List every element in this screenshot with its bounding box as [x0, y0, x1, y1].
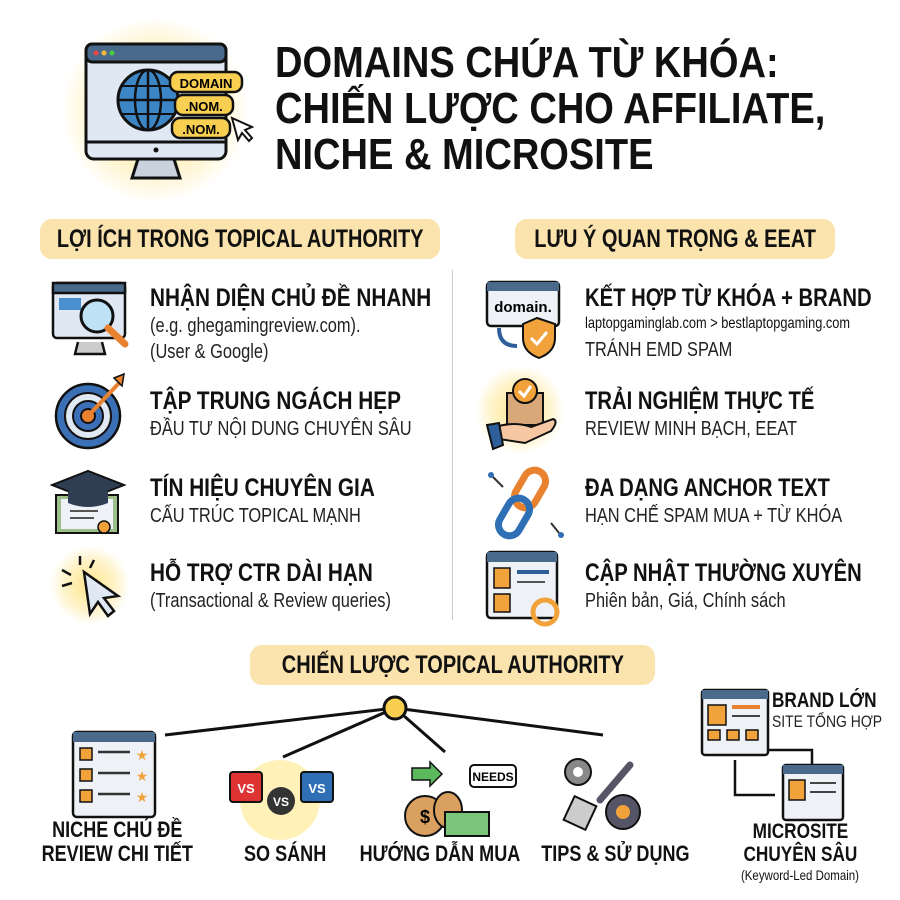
text: caution 4: CẬP NHẬT THƯỜNG XUYÊN	[585, 559, 862, 587]
text: caution 1: KẾT HỢP TỪ KHÓA + BRAND	[585, 284, 872, 312]
panel: cautions: TRÁNH EMD SPAM	[585, 339, 732, 361]
label: niche: REVIEW CHI TIẾT	[42, 841, 193, 866]
label: niche: NICHE CHỦ ĐỀ	[52, 817, 183, 842]
heading: right pill	[515, 219, 835, 259]
label: compare: SO SÁNH	[244, 841, 326, 866]
diagram: strategy tree: ★	[136, 768, 148, 784]
icon: target	[54, 372, 125, 450]
panel: cautions: laptopgaminglab.com > bestlaptopgaming.com	[585, 315, 850, 332]
panel: benefits: (e.g. ghegamingreview.com).	[150, 315, 361, 337]
heading: left pill: LỢI ÍCH TRONG TOPICAL AUTHORITY	[57, 225, 423, 253]
icon: domain shield	[486, 280, 560, 360]
icon: monitor with domain tags: DOMAIN	[180, 76, 232, 91]
label: buying guide: HƯỚNG DẪN MUA	[360, 841, 520, 866]
text: benefit 2: TẬP TRUNG NGÁCH HẸP	[150, 387, 401, 415]
panel: benefits: CẤU TRÚC TOPICAL MẠNH	[150, 505, 361, 527]
diagram: strategy tree: ★	[136, 747, 148, 763]
panel: cautions	[478, 280, 872, 626]
text: caution 2: TRẢI NGHIỆM THỰC TẾ	[585, 387, 814, 415]
panel: brand vs microsite: (Keyword-Led Domain)	[741, 867, 859, 883]
title: NICHE & MICROSITE	[275, 130, 654, 179]
icon: monitor with domain tags: .NOM.	[185, 99, 223, 114]
diagram: strategy tree: VS	[308, 781, 326, 796]
panel: benefits: (User & Google)	[150, 341, 268, 363]
text: microsite: MICROSITE	[752, 820, 848, 843]
text: benefit 3: TÍN HIỆU CHUYÊN GIA	[150, 474, 375, 502]
diagram: strategy tree: ★	[136, 789, 148, 805]
panel: cautions: HẠN CHẾ SPAM MUA + TỪ KHÓA	[585, 505, 842, 527]
heading: strategy pill	[250, 645, 655, 685]
icon: domain shield: domain.	[494, 299, 552, 316]
label: tips: TIPS & SỬ DỤNG	[541, 841, 689, 866]
text: benefit 4: HỖ TRỢ CTR DÀI HẠN	[150, 559, 373, 587]
icon: chain link	[488, 466, 564, 540]
diagram: strategy tree: VS	[237, 781, 255, 796]
heading: right pill: LƯU Ý QUAN TRỌNG & EEAT	[534, 225, 816, 253]
icon: magnifier monitor	[52, 282, 128, 356]
icon: update window	[486, 550, 560, 626]
diagram: strategy tree: NEEDS	[472, 770, 514, 784]
panel: benefits	[50, 282, 431, 622]
diagram: strategy tree	[42, 696, 689, 866]
heading: strategy pill: CHIẾN LƯỢC TOPICAL AUTHORITY	[281, 651, 624, 679]
diagram: strategy tree: $	[420, 807, 430, 827]
icon: monitor with domain tags	[66, 21, 254, 199]
text: microsite	[743, 820, 857, 866]
text: microsite: CHUYÊN SÂU	[743, 843, 857, 866]
panel: cautions: Phiên bản, Giá, Chính sách	[585, 590, 786, 612]
panel: brand vs microsite: SITE TỔNG HỢP	[772, 712, 882, 731]
panel: cautions: REVIEW MINH BẠCH, EEAT	[585, 418, 797, 440]
text: brand lớn: BRAND LỚN	[772, 689, 877, 712]
icon: monitor with domain tags: .NOM.	[182, 122, 220, 137]
icon: cursor click	[50, 545, 130, 625]
icon: hand with box	[475, 365, 565, 455]
icon: graduation cap	[50, 470, 127, 534]
diagram: strategy tree: VS	[273, 795, 289, 809]
label: niche	[42, 817, 193, 866]
title	[275, 38, 825, 179]
text: benefit 1: NHẬN DIỆN CHỦ ĐỀ NHANH	[150, 284, 431, 312]
text: caution 3: ĐA DẠNG ANCHOR TEXT	[585, 474, 830, 502]
heading: left pill	[40, 219, 440, 259]
panel: benefits: (Transactional & Review queries)	[150, 590, 391, 612]
title: DOMAINS CHỨA TỪ KHÓA:	[275, 38, 779, 87]
panel: brand vs microsite	[700, 688, 882, 883]
panel: benefits: ĐẦU TƯ NỘI DUNG CHUYÊN SÂU	[150, 418, 412, 440]
title: CHIẾN LƯỢC CHO AFFILIATE,	[275, 84, 825, 133]
